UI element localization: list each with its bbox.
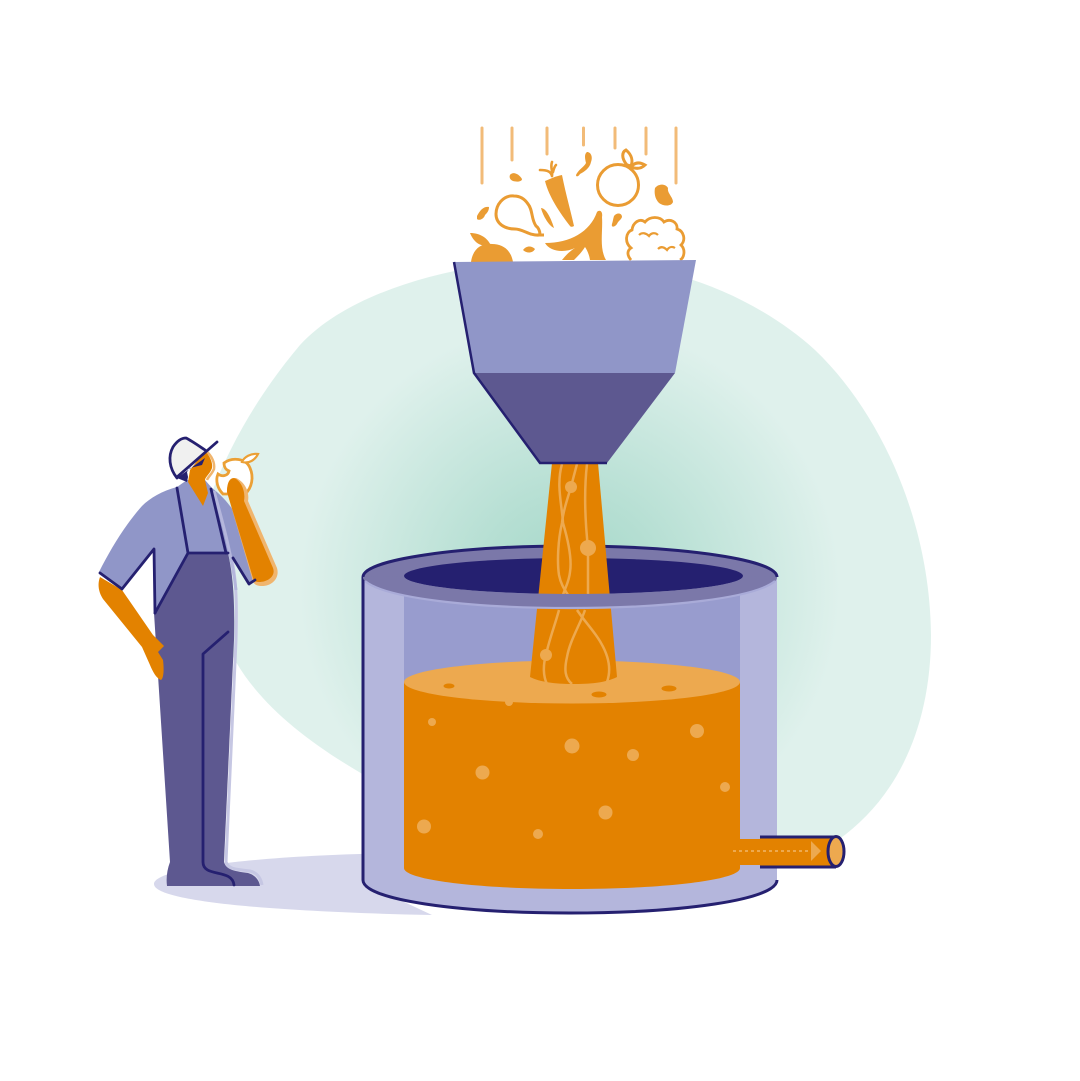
tank rim (363, 546, 777, 608)
tank body (363, 577, 777, 913)
tank opening (404, 558, 743, 594)
shirt edge highlight (214, 491, 236, 590)
orange liquid (404, 660, 740, 889)
falling food (470, 128, 684, 262)
hopper funnel (454, 260, 696, 463)
shirt (99, 480, 256, 613)
icon: orange fruit (598, 150, 645, 206)
ground shadow (154, 853, 432, 915)
left arm (99, 577, 164, 680)
icon: pear (496, 196, 544, 235)
bubbles (417, 684, 730, 839)
hopper outline (454, 262, 607, 463)
icon: carrot (540, 162, 574, 227)
cap (170, 438, 217, 482)
background blob (204, 266, 931, 880)
rim top edge (363, 546, 777, 577)
hopper lower section (474, 373, 675, 463)
icon: cauliflower (627, 218, 684, 260)
outlet pipe (733, 836, 844, 867)
strands (544, 464, 609, 684)
icon: banana (545, 211, 606, 260)
head (188, 451, 212, 506)
tank rim front band (363, 576, 777, 608)
right arm (227, 478, 278, 586)
worker figure (99, 438, 278, 886)
tank (363, 546, 777, 913)
falling motion lines (482, 128, 676, 183)
stream of food slurry (530, 463, 617, 684)
tank outline (363, 577, 777, 913)
icon: apple with leaf (470, 233, 513, 262)
overalls edge highlight (226, 556, 262, 885)
pipe opening (828, 836, 844, 866)
food scraps (477, 152, 673, 253)
rim front highlight (365, 581, 775, 608)
overalls (154, 553, 260, 886)
stream beads (540, 481, 596, 661)
tank interior wall (404, 590, 740, 690)
flow arrow (733, 841, 821, 861)
icon: bitten apple (217, 454, 258, 494)
garment lines (100, 488, 255, 885)
hopper upper section (454, 260, 696, 373)
face highlight (206, 451, 214, 480)
